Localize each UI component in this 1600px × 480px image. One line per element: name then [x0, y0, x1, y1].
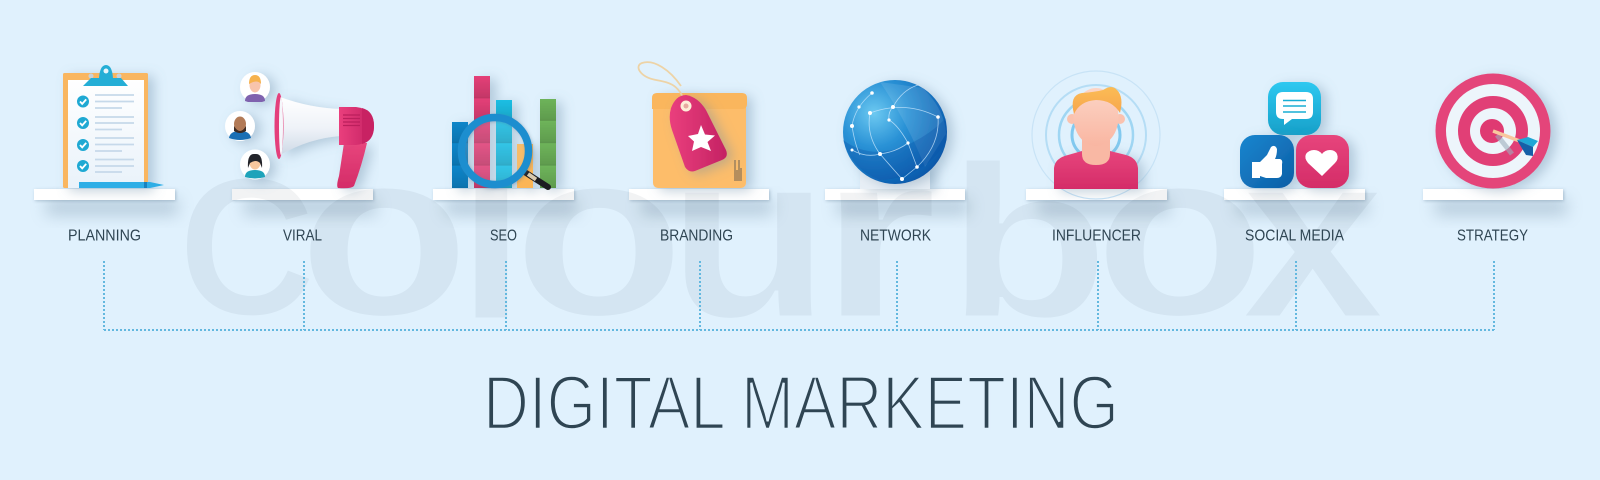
labels [68, 228, 1528, 244]
watermark: Colourbox: C [178, 136, 316, 358]
icon: audience avatars [225, 72, 270, 180]
bars [452, 76, 556, 188]
watermark: Colourbox: b [946, 120, 1110, 363]
watermark: Colourbox: o [297, 100, 471, 366]
watermark: Colourbox: u [667, 101, 831, 368]
label: strategy: STRATEGY [1457, 228, 1528, 244]
icon: megaphone [274, 93, 374, 188]
label: SEO: SEO [490, 228, 517, 244]
watermark: Colourbox: r [818, 102, 938, 368]
watermark: Colourbox [178, 100, 1385, 368]
heart block [1296, 135, 1349, 188]
label: network: NETWORK [860, 228, 932, 244]
shelves [34, 189, 1567, 215]
label: viral: VIRAL [283, 228, 322, 244]
magnifier [462, 118, 548, 187]
icon: box with price tag [638, 62, 747, 188]
icon: SEO bar chart with magnifier [452, 76, 556, 188]
chat block [1268, 82, 1321, 135]
label: influencer: INFLUENCER [1052, 228, 1141, 244]
icon: social media blocks [1240, 82, 1349, 188]
icon: clipboard [63, 65, 164, 188]
watermark: Colourbox: l [455, 154, 528, 358]
watermark: Colourbox: x [1241, 102, 1385, 368]
title: DIGITAL MARKETING [483, 361, 1119, 446]
icon: influencer [1032, 71, 1160, 199]
like block [1240, 135, 1294, 188]
label: social media: SOCIAL MEDIA [1245, 228, 1345, 244]
connector: dotted line [104, 261, 1494, 330]
watermark: Colourbox: o [512, 100, 686, 366]
label: planning: PLANNING [68, 228, 141, 244]
icon: network globe [843, 80, 947, 189]
icon: target with arrow [1436, 74, 1550, 188]
label: branding: BRANDING [660, 228, 733, 244]
watermark: Colourbox: o [1093, 100, 1267, 366]
